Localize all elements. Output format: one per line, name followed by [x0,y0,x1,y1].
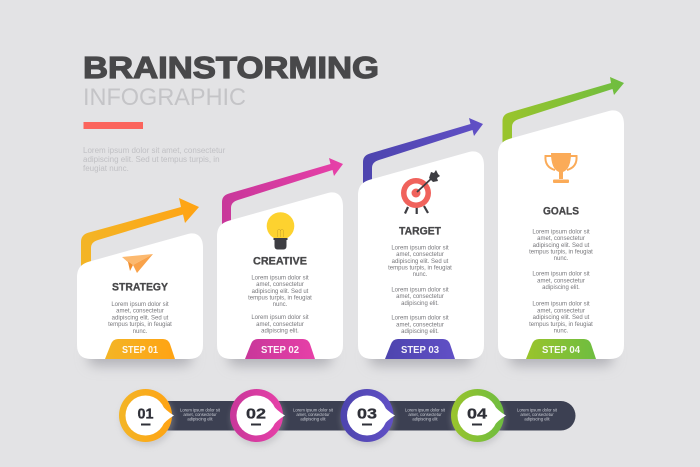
body text: target: tempus turpis, in feugiat [388,266,452,272]
body text: target: amet, consectetur [396,294,444,300]
body text: target: nunc. [413,272,428,278]
body text: target: Lorem ipsum dolor sit [391,287,449,293]
icon: trophy [545,153,577,183]
timeline step 01: 01 [138,406,154,423]
panel: strategy [77,233,203,366]
arrow: step 1 [81,198,199,266]
timeline step 02: 02 [246,406,266,423]
icon: target and dart [401,170,440,214]
body text: goals: Lorem ipsum dolor sit [532,229,590,235]
body text: goals: nunc. [554,328,569,334]
body text: strategy: tempus turpis, in feugiat [108,322,172,328]
timeline step 03: 03 [357,406,377,423]
tab: step 01: STEP 01 [122,345,158,356]
arrow: step 2 [222,158,343,226]
timeline step 01: amet, consectetur [183,412,217,417]
tab: step 04: STEP 04 [542,345,580,356]
body text: target: Lorem ipsum dolor sit [391,245,449,251]
body text: creative: Lorem ipsum dolor sit [251,275,309,281]
panel: creative [217,192,343,366]
accent bar [84,122,143,129]
icon: light bulb [267,212,294,250]
heading: target: TARGET [399,226,441,238]
heading: goals: GOALS [543,206,579,218]
timeline step 03: amet, consectetur [408,412,442,417]
intro text: feugiat nunc. [83,164,129,173]
body text: strategy: nunc. [133,329,148,335]
timeline step 03 [340,389,446,446]
timeline step 02: adipiscing elit [300,416,326,422]
body text: goals: adipiscing elit. [542,285,580,291]
panel: goals [498,110,624,366]
body text: goals: adipiscing elit. Sed ut [533,315,590,321]
timeline step 04: 04 [467,406,488,423]
timeline step 01 [119,389,221,446]
timeline step 04 [451,389,558,446]
timeline step 01: Lorem ipsum dolor sit [180,408,221,412]
timeline step 02: amet, consectetur [296,412,330,417]
body text: goals: Lorem ipsum dolor sit [532,302,590,308]
body text: creative: adipiscing elit. Sed ut [252,289,309,295]
body text: target: adipiscing elit. [401,301,439,307]
body text: target: amet, consectetur [396,322,444,328]
timeline step 04: Lorem ipsum dolor sit [517,408,558,412]
subtitle: INFOGRAPHIC [83,84,246,111]
tab: step 02: STEP 02 [261,345,299,356]
body text: goals: Lorem ipsum dolor sit [532,272,590,278]
intro text: adipiscing elit. Sed ut tempus turpis, in [83,155,220,164]
body text: goals: tempus turpis, in feugiat [529,322,593,328]
tab: step 02 [245,339,315,359]
body text: creative: amet, consectetur [256,282,304,288]
title: BRAINSTORMING [83,51,379,85]
icon: paper plane [122,254,153,273]
body text: goals: nunc. [554,256,569,262]
heading: creative: CREATIVE [253,256,307,268]
arrow: step 3 [363,118,483,186]
timeline step 04: adipiscing elit [524,416,550,422]
arrow: step 4 [502,77,624,144]
body text: target: Lorem ipsum dolor sit [391,316,449,322]
intro text: Lorem ipsum dolor sit amet, consectetur [83,146,226,155]
body text: goals: amet, consectetur [537,278,585,284]
body text: strategy: adipiscing elit. Sed ut [112,315,169,321]
tab: step 03: STEP 03 [401,345,439,356]
body text: strategy: Lorem ipsum dolor sit [111,302,169,308]
body text: goals: tempus turpis, in feugiat [529,250,593,256]
body text: creative: tempus turpis, in feugiat [248,296,312,302]
body text: target: adipiscing elit. [401,329,439,335]
timeline step 04: amet, consectetur [520,412,554,417]
timeline step 03: adipiscing elit [412,416,438,422]
panel: target [358,151,484,366]
body text: creative: amet, consectetur [256,322,304,328]
body text: target: adipiscing elit. Sed ut [392,259,449,265]
body text: creative: nunc. [273,302,288,308]
body text: creative: Lorem ipsum dolor sit [251,315,309,321]
tab: step 03 [385,339,455,359]
body text: goals: adipiscing elit. Sed ut [533,243,590,249]
body text: goals: amet, consectetur [537,236,585,242]
body text: goals: amet, consectetur [537,308,585,314]
body text: creative: adipiscing elit. [261,329,299,335]
heading: strategy: STRATEGY [112,282,169,294]
timeline step 01: adipiscing elit [187,416,213,422]
tab: step 04 [526,339,596,359]
timeline step 03: Lorem ipsum dolor sit [405,408,446,412]
timeline step 02 [230,389,334,446]
body text: target: amet, consectetur [396,252,444,258]
body text: strategy: amet, consectetur [116,309,164,315]
timeline step 02: Lorem ipsum dolor sit [293,408,334,412]
timeline bar [150,401,576,430]
